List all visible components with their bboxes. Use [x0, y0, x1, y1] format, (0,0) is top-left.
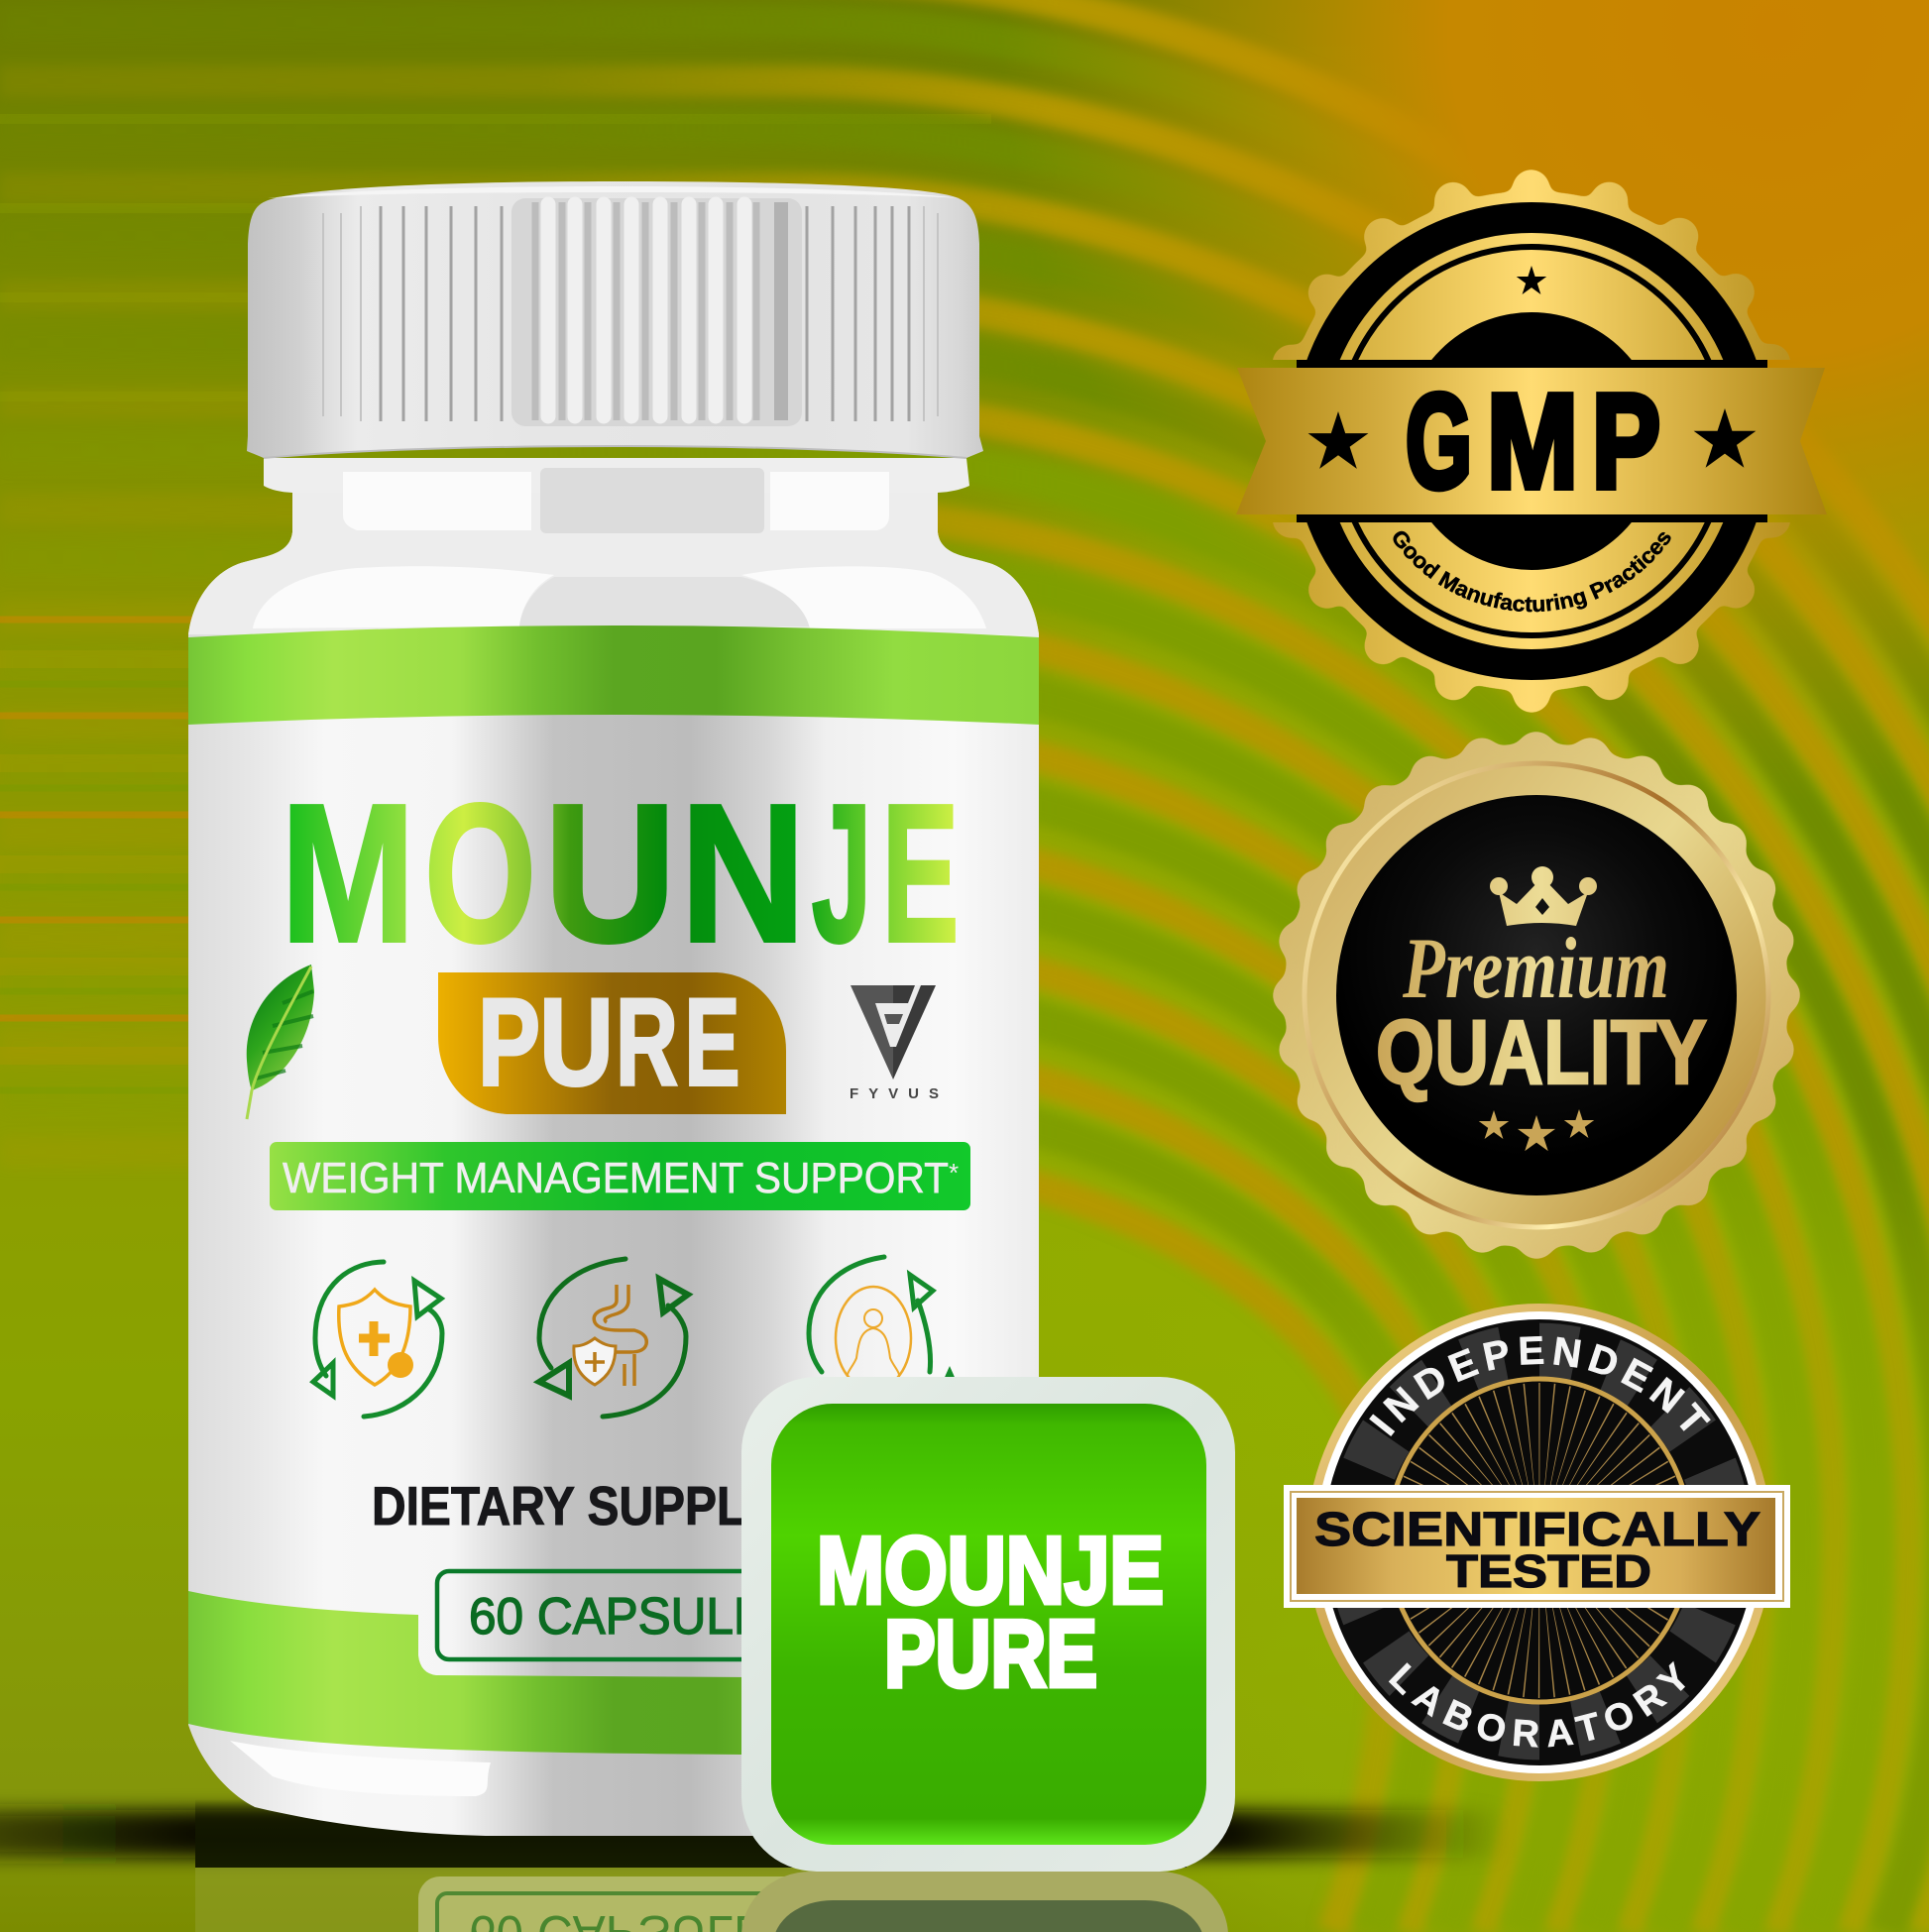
bottom green band: [188, 1591, 1039, 1757]
60 capsules box: [437, 1571, 834, 1659]
weight management banner: [270, 1142, 970, 1210]
neck flange: [264, 458, 969, 493]
gold banner: SCIENTIFICALLY: [1314, 1504, 1760, 1556]
ribbon: [1236, 368, 1827, 514]
outer rings: [1306, 1304, 1772, 1781]
icon: leaf: [247, 965, 314, 1119]
brand name MOUNJE: O: [424, 763, 536, 983]
PURE tag: [438, 972, 786, 1114]
star: left: [1308, 411, 1368, 469]
gold banner: [1284, 1485, 1790, 1608]
cap faint ribs: [323, 206, 938, 421]
badge: scientifically tested: [1284, 1304, 1790, 1781]
logo: FYVUS: FYVUS: [850, 1085, 939, 1102]
laboratory arc text: LABORATORY: [1388, 1661, 1685, 1748]
badge: GMP: [1236, 170, 1827, 713]
product bottle: [188, 181, 1039, 1836]
quality: QUALITY: [1376, 1002, 1707, 1103]
icon: gut: [539, 1259, 688, 1417]
60 capsules box: 60 CAPSULES: [469, 1588, 799, 1646]
weight management banner: WEIGHT MANAGEMENT SUPPORT: [283, 1154, 949, 1202]
floor reflection: [195, 1868, 1228, 1932]
PURE tag: U: [539, 973, 614, 1112]
gold seal: [1279, 188, 1784, 694]
neck and shoulder highlights: [188, 468, 1039, 634]
floor shadow: [0, 1799, 1507, 1868]
inner sunburst: [1388, 1379, 1691, 1702]
star: right: [1694, 408, 1756, 468]
icon: immune shield: [313, 1262, 442, 1417]
brand name MOUNJE: [281, 763, 960, 983]
pack label: MOUNJE: [817, 1518, 1164, 1624]
badge: premium quality: [1285, 743, 1788, 1247]
bottle body: [188, 476, 1039, 1836]
brand name MOUNJE: U: [543, 763, 676, 983]
GMP lettering: G: [1406, 367, 1472, 515]
independent arc text: INDEPENDENT: [1369, 1336, 1711, 1436]
cap: [247, 181, 983, 458]
dietary supplement text: DIETARY SUPPLEMENT: [372, 1475, 912, 1536]
white tab: [418, 1613, 753, 1677]
brand name MOUNJE: J: [811, 763, 872, 983]
GMP lettering: M: [1487, 367, 1578, 515]
PURE tag: E: [684, 973, 739, 1112]
premium script: Premium: [1402, 921, 1669, 1017]
icon: crown: [1490, 866, 1597, 926]
PURE tag: P: [478, 973, 540, 1112]
star: top: [1517, 266, 1546, 294]
radial stripes: [1355, 1351, 1724, 1732]
capsule pack: [741, 1377, 1235, 1872]
three stars: [1479, 1109, 1594, 1151]
gold ring: [1305, 763, 1768, 1227]
cap centre ribbed panel: [511, 198, 802, 426]
logo: FYVUS: [850, 985, 939, 1102]
cap outer ribs: [381, 206, 909, 421]
weight management banner: *: [949, 1158, 959, 1188]
good manufacturing practices: Good Manufacturing Practices: [1394, 531, 1671, 613]
bottom highlight: [230, 1741, 491, 1796]
black bars: [1297, 360, 1767, 522]
capsule pack: PURE: [884, 1601, 1097, 1707]
black centre: [1336, 795, 1737, 1195]
brand name MOUNJE: E: [882, 763, 960, 983]
brand name MOUNJE: N: [680, 763, 806, 983]
gold banner: TESTED: [1446, 1545, 1651, 1597]
PURE tag: R: [616, 973, 678, 1112]
GMP lettering: P: [1592, 367, 1660, 515]
scalloped seal: [1285, 743, 1788, 1247]
brand name MOUNJE: M: [281, 763, 415, 983]
icon: meditation: [809, 1257, 958, 1390]
top green band: [188, 625, 1039, 725]
GMP lettering: [1406, 367, 1660, 515]
